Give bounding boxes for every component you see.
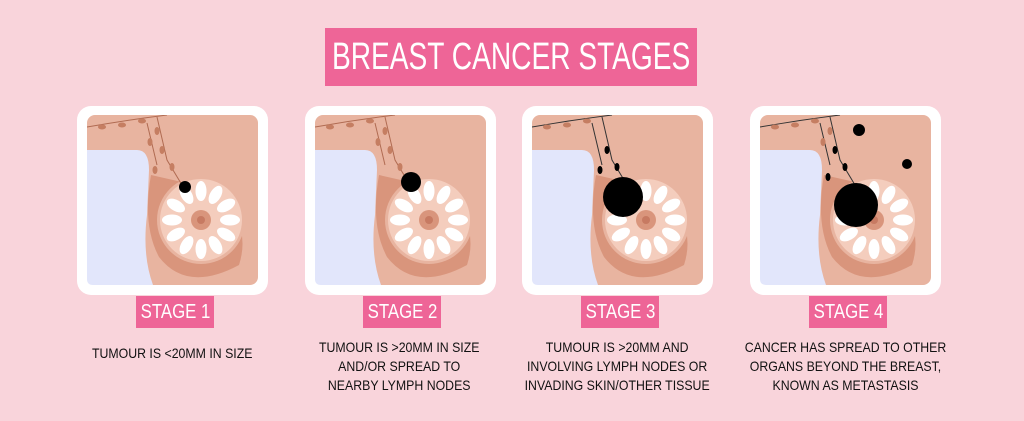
panel: stage 1	[77, 106, 268, 295]
title: BREAST CANCER STAGES	[332, 36, 690, 78]
text: stage 4	[744, 339, 946, 393]
title	[325, 28, 697, 86]
text: stage 2: AND/OR SPREAD TO	[338, 358, 460, 374]
panel: stage 4	[750, 106, 941, 295]
tumour	[179, 181, 191, 193]
tumour	[401, 172, 421, 192]
panel: stage 2	[305, 106, 496, 295]
text: stage 3: INVADING SKIN/OTHER TISSUE	[524, 377, 710, 393]
text: stage 4: ORGANS BEYOND THE BREAST,	[749, 358, 941, 374]
text: stage 2	[319, 339, 479, 393]
label: stage 2: STAGE 2	[367, 301, 437, 323]
tumour and metastases	[834, 124, 912, 227]
panel: stage 3	[522, 106, 713, 295]
text: stage 3	[524, 339, 710, 393]
text: stage 4: CANCER HAS SPREAD TO OTHER	[744, 339, 946, 355]
text: stage 2: TUMOUR IS >20MM IN SIZE	[319, 339, 479, 355]
label: stage 3: STAGE 3	[585, 301, 655, 323]
label: stage 4: STAGE 4	[813, 301, 883, 323]
text: stage 1: TUMOUR IS <20MM IN SIZE	[92, 345, 252, 361]
label: stage 1	[136, 296, 214, 328]
text: stage 4: KNOWN AS METASTASIS	[772, 377, 918, 393]
text: stage 3: INVOLVING LYMPH NODES OR	[527, 358, 707, 374]
tumour	[603, 177, 643, 217]
label: stage 3	[581, 296, 659, 328]
text: stage 3: TUMOUR IS >20MM AND	[546, 339, 688, 355]
label: stage 2	[363, 296, 441, 328]
label: stage 4	[809, 296, 887, 328]
label: stage 1: STAGE 1	[140, 301, 210, 323]
text: stage 2: NEARBY LYMPH NODES	[328, 377, 470, 393]
